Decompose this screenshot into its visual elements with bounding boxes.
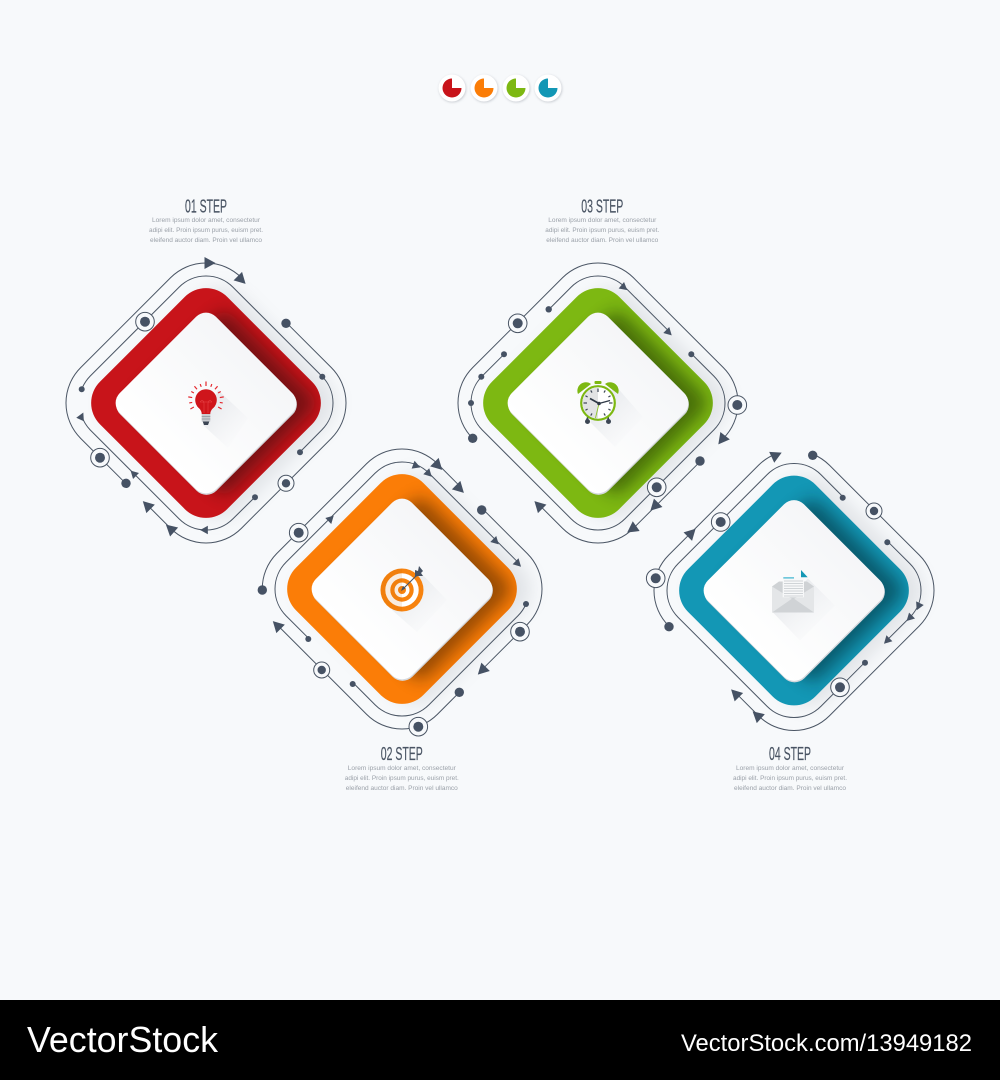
text: step 2: 02 STEP [381,744,423,764]
icon: green pie [502,74,530,102]
text: step 2: Lorem ipsum dolor amet, consectetur [348,765,457,772]
circuit nodes [79,312,325,500]
panel: step 2 diamond [258,449,543,736]
text: step 1 [149,196,263,244]
text: step 4: adipi elit. Proin ipsum purus, euism pret. [733,775,847,782]
white card [698,494,891,688]
icon: alarm clock [577,381,643,447]
text: step 1: eleifend auctor diam. Proin vel ullamco [150,237,262,244]
text: step 2 [345,744,459,792]
circuit lines [654,454,934,731]
text: step 3: eleifend auctor diam. Proin vel ullamco [546,237,659,244]
icon: orange pie [470,74,498,102]
text: step 4: 04 STEP [769,744,811,764]
footer logo text: VectorStock [27,1019,219,1060]
panel: step 1 diamond [66,257,347,543]
circuit arrows [269,458,524,679]
white card [306,493,499,687]
white card [110,307,303,501]
text: step 3: adipi elit. Proin ipsum purus, euism pret. [545,227,660,234]
icon: target with arrow [380,566,447,632]
white card [502,307,695,501]
circuit nodes [646,451,890,697]
circuit nodes [468,306,747,497]
text: step 3: Lorem ipsum dolor amet, consectetur [548,217,657,224]
panel: step 3 diamond [458,263,747,543]
circuit lines [458,263,738,543]
text: step 3 [545,196,660,244]
legend: four pie icons [438,74,562,102]
circuit lines [262,449,542,729]
text: step 4: eleifend auctor diam. Proin vel ullamco [734,785,846,792]
text: step 2: eleifend auctor diam. Proin vel ullamco [346,785,458,792]
green rounded diamond [471,276,725,530]
icon: red pie [438,74,466,102]
circuit arrows [684,447,924,723]
text: step 3: 03 STEP [581,196,623,216]
text: step 1: 01 STEP [185,196,227,216]
icon: blue pie [534,74,562,102]
text: step 1: adipi elit. Proin ipsum purus, euism pret. [149,227,263,234]
circuit arrows [76,257,250,536]
panel: step 4 diamond [646,447,935,731]
footer bar [0,1000,1000,1080]
text: step 4: Lorem ipsum dolor amet, consectetur [736,765,845,772]
red rounded diamond [79,276,333,530]
circuit nodes [258,505,529,736]
circuit arrows [530,282,730,537]
text: step 1: Lorem ipsum dolor amet, consectetur [152,217,261,224]
blue rounded diamond [667,463,921,718]
circuit lines [66,263,346,543]
text: step 4 [733,744,847,792]
footer url text: VectorStock.com/13949182 [681,1030,972,1057]
icon: open envelope [772,570,835,640]
text: step 2: adipi elit. Proin ipsum purus, euism pret. [345,775,459,782]
orange rounded diamond [275,462,529,716]
icon: light bulb [188,382,248,448]
